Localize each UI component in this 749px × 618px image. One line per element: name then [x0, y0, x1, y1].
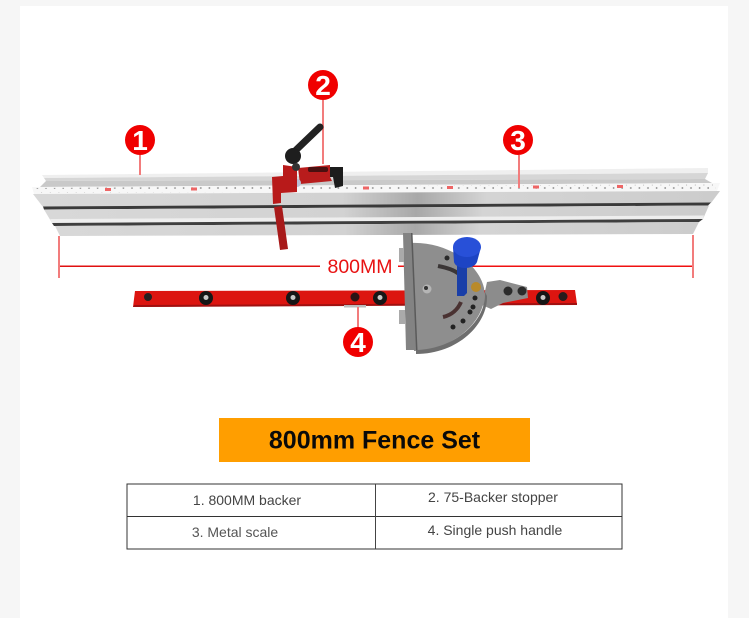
leader line 1 [139, 155, 141, 175]
brass screw [471, 282, 481, 292]
title banner [219, 418, 530, 462]
red lower bar [274, 206, 288, 250]
number badge 2: 2 [315, 70, 331, 101]
number badge 3 [503, 125, 533, 156]
metal scale strip [32, 183, 720, 194]
bar knobs [144, 293, 152, 301]
cell 3: 3. Metal scale [192, 524, 278, 540]
slots [438, 266, 459, 274]
cell 1: 1. 800MM backer [193, 492, 301, 508]
cell 4: 4. Single push handle [428, 522, 563, 538]
plate bolts [399, 248, 404, 262]
fence plate [403, 233, 417, 350]
leader line 2 [322, 100, 324, 164]
protractor plate [410, 243, 485, 351]
title banner: 800mm Fence Set [269, 426, 481, 454]
dimension line [58, 235, 694, 278]
number badge 4: 4 [350, 327, 366, 358]
front face [33, 191, 720, 207]
cell 2: 2. 75-Backer stopper [428, 489, 558, 505]
red upright [272, 165, 297, 204]
adjustment arm [482, 280, 528, 309]
black bracket [330, 167, 343, 188]
dimension label: 800MM [327, 256, 393, 278]
number badge 3: 3 [510, 125, 526, 156]
red clamp block [298, 165, 332, 184]
lower rail [55, 222, 699, 236]
bolt [293, 179, 301, 187]
parts table [127, 484, 622, 549]
push handle bar [133, 290, 577, 308]
top rail [42, 168, 708, 178]
number badge 1: 1 [132, 125, 148, 156]
leader line 4 [357, 307, 359, 328]
number badge 1 [125, 125, 155, 156]
locking handle [296, 127, 320, 150]
number badge 4 [343, 327, 373, 358]
mitre gauge [399, 233, 528, 354]
middle rail [44, 206, 709, 223]
blue knob [457, 262, 467, 296]
leader line 3 [518, 155, 520, 188]
fence rail assembly [32, 168, 720, 236]
number badge 2 [308, 70, 338, 101]
plate holes [444, 256, 450, 260]
backer stopper [272, 127, 343, 250]
